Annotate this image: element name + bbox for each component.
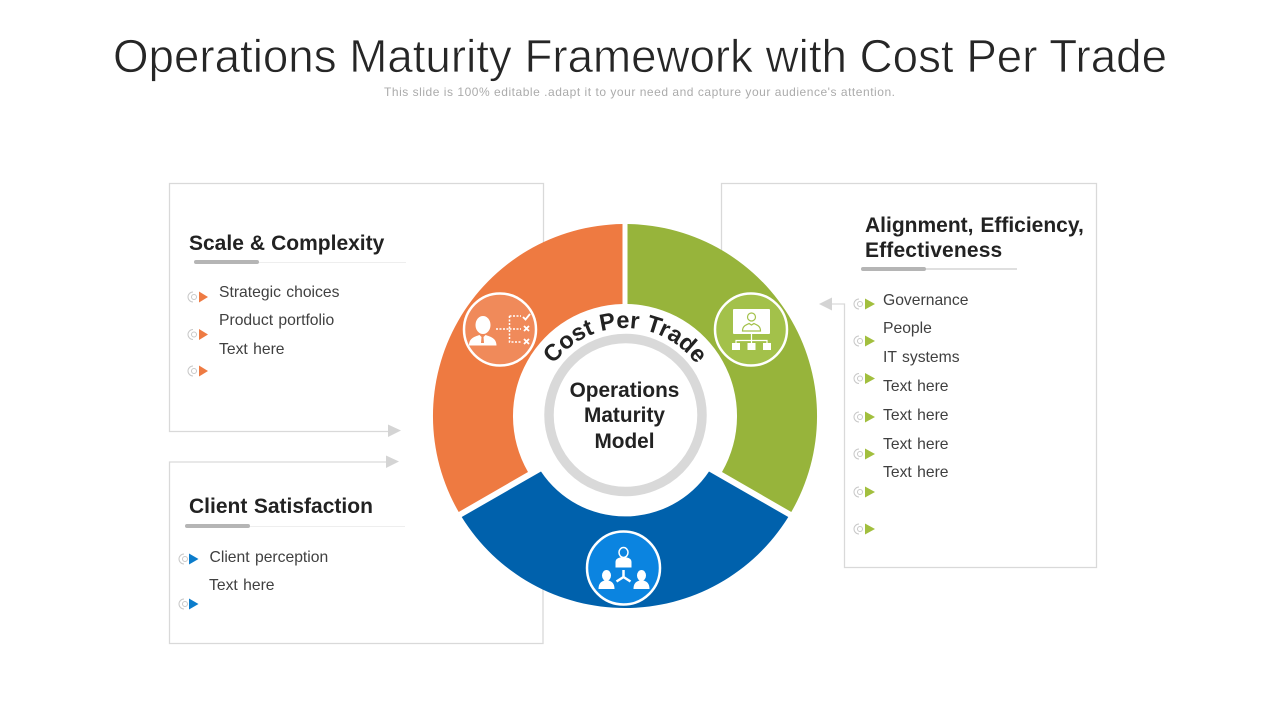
bullet list: scale and complexity: Strategic choices [219,284,340,301]
bullet list: client satisfaction [179,549,328,610]
panel outline with arrow: scale and complexity [170,184,544,437]
icon: presenter org chart [715,294,787,366]
heading: alignment, efficiency, effectiveness: Effectiveness [865,239,1002,262]
center label: Model [594,430,655,453]
bullet list: client satisfaction: Client perception [210,549,328,566]
panel outline with arrow: client satisfaction [170,456,543,644]
curved label: cost per trade: Cost Per Trade [544,313,704,362]
center label [570,379,679,453]
bullet list: alignment: Text here [883,464,949,481]
heading underline [194,260,406,264]
bullet list: scale and complexity: Text here [219,341,285,358]
bullet list: alignment: Governance [883,292,969,309]
center label: Maturity [584,404,665,427]
panel: scale and complexity [170,184,544,437]
bullet list: client satisfaction: Text here [209,577,275,594]
bullet list: alignment [854,292,969,534]
panel: alignment, efficiency, effectiveness [722,184,1096,568]
bullet list: alignment: IT systems [883,349,960,366]
center label: Operations [570,379,679,402]
heading: alignment, efficiency, effectiveness: Alignment, Efficiency, [865,214,1084,237]
segment: blue [462,472,788,608]
heading underline [185,524,405,528]
icon: person with decision tree [464,294,536,366]
bullet list: scale and complexity: Product portfolio [219,312,335,329]
bullet list: alignment: People [883,320,932,337]
bullet list: alignment: Text here [883,378,949,395]
panel: client satisfaction [170,456,543,644]
center ring [549,338,702,492]
bullet list: alignment: Text here [883,407,949,424]
segment: green [628,224,817,512]
bullet list: alignment: Text here [883,436,949,453]
title: Operations Maturity Framework with Cost Per Trade [113,30,1167,82]
donut chart [432,224,818,608]
bullet list: scale and complexity [188,284,340,376]
subtitle: This slide is 100% editable .adapt it to your need and capture your audience's attention. [384,85,895,99]
icon: team of three [587,532,660,604]
heading: client satisfaction: Client Satisfaction [189,495,373,518]
panel outline with arrow: alignment [722,184,1096,568]
heading underline [861,267,1017,271]
segment: orange [433,224,622,512]
heading: alignment, efficiency, effectiveness [865,214,1084,262]
heading: scale and complexity: Scale & Complexity [189,232,385,255]
